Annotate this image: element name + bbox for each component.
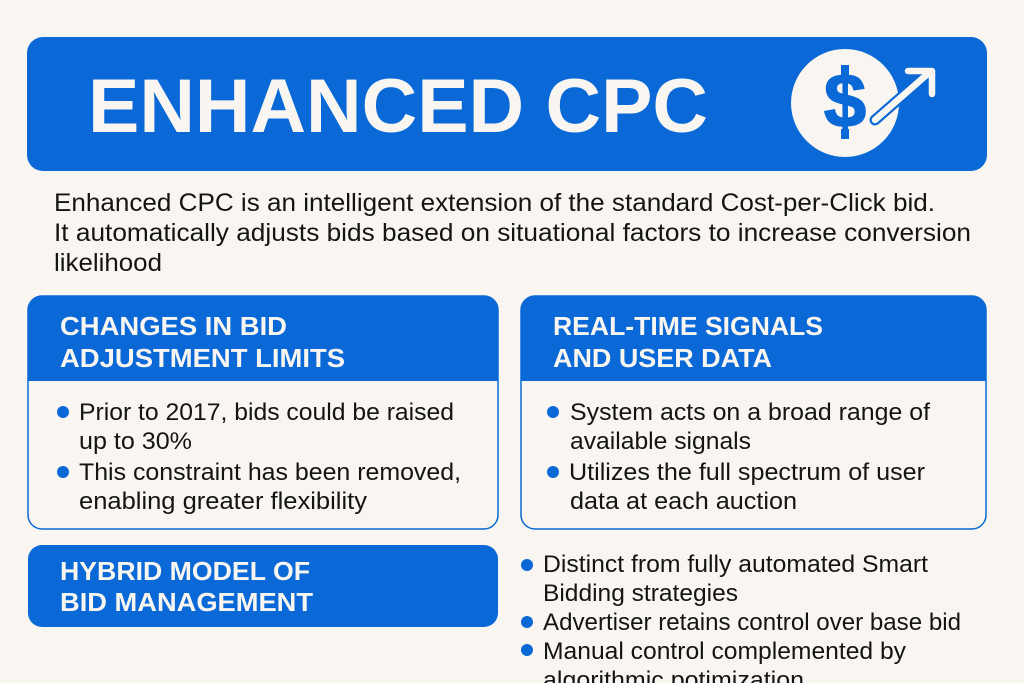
intro text: likelihood <box>54 249 162 277</box>
bullet list: data at each auction <box>570 488 797 515</box>
bullet list: hybrid model details <box>521 551 961 683</box>
panel heading <box>60 311 345 373</box>
intro text: Enhanced CPC is an intelligent extension of the standard Cost-per-Click bid. <box>54 189 935 217</box>
icon: dollar coin with rising arrow: $ <box>824 59 866 144</box>
bullet list <box>547 399 930 515</box>
bullet list: up to 30% <box>79 428 192 455</box>
panel heading <box>553 311 823 373</box>
icon: dollar coin with rising arrow <box>791 49 932 157</box>
bullet list: available signals <box>570 428 751 455</box>
bullet list: hybrid model details: Manual control complemented by <box>543 638 906 665</box>
bullet list: hybrid model details: Bidding strategies <box>543 580 738 607</box>
intro text <box>54 189 971 277</box>
panel heading: ADJUSTMENT LIMITS <box>60 343 345 373</box>
intro text: It automatically adjusts bids based on situational factors to increase conversion <box>54 219 971 247</box>
header banner <box>27 37 987 171</box>
bullet list: Prior to 2017, bids could be raised <box>79 399 454 426</box>
panel heading: REAL-TIME SIGNALS <box>553 311 823 341</box>
bullet list: System acts on a broad range of <box>570 399 930 426</box>
panel: hybrid model of bid management <box>28 545 498 627</box>
bullet list: enabling greater flexibility <box>79 488 367 515</box>
panel heading: CHANGES IN BID <box>60 311 287 341</box>
panel: changes in bid adjustment limits <box>28 296 498 529</box>
panel heading: AND USER DATA <box>553 343 772 373</box>
bullet list: hybrid model details: Advertiser retains control over base bid <box>543 609 961 636</box>
panel heading: HYBRID MODEL OF <box>60 556 310 586</box>
bullet list: hybrid model details: Distinct from fully automated Smart <box>543 551 928 578</box>
panel heading: BID MANAGEMENT <box>60 587 313 617</box>
bullet list <box>57 399 461 515</box>
panel: real-time signals and user data <box>521 296 986 529</box>
bullet list: This constraint has been removed, <box>79 459 461 486</box>
panel heading <box>60 556 313 617</box>
bullet list: Utilizes the full spectrum of user <box>569 459 925 486</box>
title: ENHANCED CPC <box>88 64 708 149</box>
